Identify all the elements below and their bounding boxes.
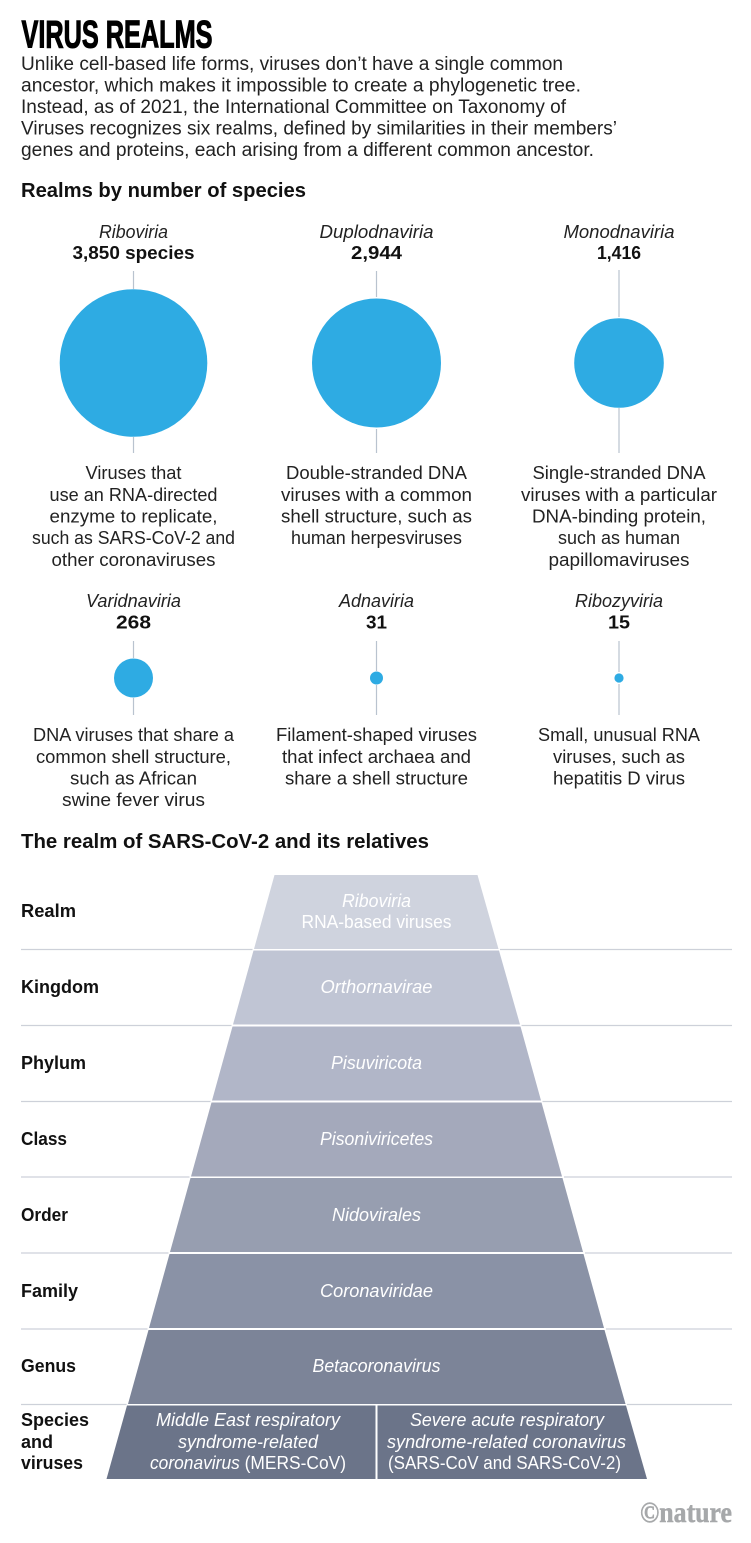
rank labels: and	[21, 1432, 53, 1452]
rank labels	[21, 901, 99, 1473]
realm: Adnaviria	[276, 590, 477, 788]
realm: Varidnaviria: DNA viruses that share a	[33, 724, 235, 745]
realm: Monodnaviria	[521, 221, 717, 570]
rank labels: Phylum	[21, 1053, 86, 1073]
realm: Ribozyviria	[538, 590, 701, 788]
intro text	[21, 54, 617, 161]
realm: Varidnaviria: such as African	[70, 768, 197, 788]
realm: Riboviria: Viruses that	[86, 462, 182, 483]
realm: Monodnaviria: 1,416	[597, 242, 641, 263]
rank labels: Class	[21, 1129, 67, 1149]
realm: Ribozyviria: Small, unusual RNA	[538, 724, 701, 745]
realm: Adnaviria: Filament-shaped viruses	[276, 724, 477, 745]
realm: Riboviria	[32, 221, 235, 570]
realm: Duplodnaviria: Duplodnaviria	[320, 221, 434, 242]
heading: realm of SARS-CoV-2: The realm of SARS-CoV-2 and its relatives	[21, 830, 429, 853]
nature logo: ©nature	[640, 1496, 732, 1529]
realm: Monodnaviria: Single-stranded DNA	[532, 462, 706, 483]
realm: Monodnaviria: DNA-binding protein,	[532, 506, 706, 526]
realm: Monodnaviria: viruses with a particular	[521, 484, 717, 505]
realm: Adnaviria: Adnaviria	[338, 590, 414, 611]
realm: Riboviria: other coronaviruses	[52, 549, 215, 570]
tier: kingdom	[233, 950, 520, 1024]
tier: phylum: Pisuviricota	[331, 1052, 422, 1073]
realm: Monodnaviria: Monodnaviria	[564, 221, 674, 242]
realm: Varidnaviria: common shell structure,	[36, 746, 231, 767]
realm: Riboviria: such as SARS-CoV-2 and	[32, 527, 235, 548]
realm: Riboviria: use an RNA-directed	[50, 484, 218, 505]
realm: Varidnaviria: Varidnaviria	[86, 590, 181, 611]
tier: genus	[128, 1330, 626, 1404]
realm: Monodnaviria: papillomaviruses	[548, 549, 690, 570]
rank labels: Genus	[21, 1356, 76, 1376]
realm: Duplodnaviria: 2,944	[351, 242, 403, 263]
tier: order	[170, 1178, 583, 1252]
tier: order: Nidovirales	[332, 1204, 421, 1225]
tier: class	[191, 1102, 562, 1176]
realm: Adnaviria: that infect archaea and	[282, 746, 471, 767]
tier: realm: RNA-based viruses	[302, 911, 452, 932]
realm: Varidnaviria: swine fever virus	[62, 789, 205, 810]
tier: species SARS: Severe acute respiratory	[410, 1409, 606, 1430]
tier: kingdom: Orthornavirae	[320, 976, 432, 997]
realm: Duplodnaviria: shell structure, such as	[281, 506, 472, 526]
intro text: Viruses recognizes six realms, defined by similarities in their members’	[21, 118, 617, 140]
realm: Varidnaviria	[33, 590, 235, 810]
realm: Adnaviria: share a shell structure	[285, 768, 468, 788]
realm: Duplodnaviria: human herpesviruses	[291, 527, 462, 548]
taxonomy pyramid	[106, 875, 647, 1479]
rank labels: Family	[21, 1281, 78, 1301]
realm: Riboviria: Riboviria	[99, 221, 168, 242]
rank labels: Order	[21, 1205, 68, 1225]
tier: family: Coronaviridae	[320, 1280, 433, 1301]
rank labels: Species	[21, 1410, 89, 1430]
realm: Duplodnaviria: viruses with a common	[281, 484, 472, 505]
intro text: genes and proteins, each arising from a different common ancestor.	[21, 140, 594, 161]
title: VIRUS REALMS	[22, 14, 212, 57]
tier: species SARS: (SARS-CoV and SARS-CoV-2)	[388, 1452, 621, 1473]
realm: Riboviria: 3,850 species	[72, 242, 194, 263]
tier: species SARS	[378, 1406, 647, 1479]
realm: Duplodnaviria	[281, 221, 472, 548]
tier: species MERS	[106, 1406, 376, 1479]
tier: species MERS: syndrome-related	[178, 1431, 319, 1452]
tier: phylum	[212, 1026, 541, 1100]
realm: Varidnaviria: 268	[116, 612, 151, 632]
realm: Duplodnaviria: Double-stranded DNA	[286, 462, 468, 483]
tier: species MERS: coronavirus (MERS-CoV)	[150, 1452, 346, 1473]
heading: realms by number of species: Realms by number of species	[21, 179, 306, 202]
intro text: Unlike cell-based life forms, viruses don’t have a single common	[21, 54, 563, 75]
tier: realm	[254, 875, 498, 949]
realm: Ribozyviria: hepatitis D virus	[553, 768, 685, 788]
realm: Ribozyviria: viruses, such as	[553, 746, 685, 767]
rank labels: Kingdom	[21, 977, 99, 997]
intro text: Instead, as of 2021, the International Committee on Taxonomy of	[21, 97, 567, 118]
tier: family	[149, 1254, 604, 1328]
realm: Riboviria: enzyme to replicate,	[50, 506, 218, 526]
rank labels: viruses	[21, 1453, 83, 1473]
tier: genus: Betacoronavirus	[312, 1355, 440, 1376]
tier: species SARS: syndrome-related coronavirus	[387, 1431, 626, 1452]
rank labels: Realm	[21, 901, 76, 921]
intro text: ancestor, which makes it impossible to create a phylogenetic tree.	[21, 76, 581, 96]
realm: Adnaviria: 31	[366, 612, 387, 632]
realm: Ribozyviria: 15	[608, 612, 630, 632]
realm: Ribozyviria: Ribozyviria	[575, 590, 663, 611]
tier: realm: Riboviria	[342, 890, 411, 911]
tier: class: Pisoniviricetes	[320, 1128, 433, 1149]
realm: Monodnaviria: such as human	[558, 527, 680, 548]
tier: species MERS: Middle East respiratory	[156, 1409, 342, 1430]
